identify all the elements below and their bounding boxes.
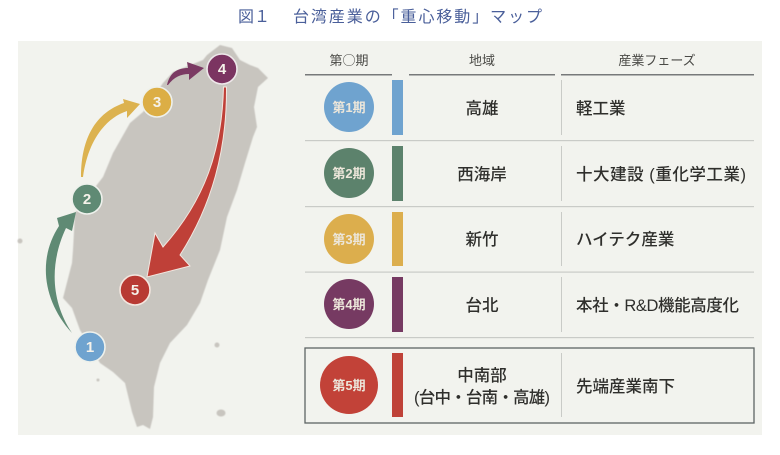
marker 3: 3 xyxy=(153,94,161,111)
table header: 地域 xyxy=(469,53,495,68)
row: period 5 highlighted xyxy=(305,348,754,423)
row: period 2: 第2期 xyxy=(332,166,366,181)
row: period 1: 軽工業 xyxy=(576,99,626,118)
table header: 第○期 xyxy=(329,50,369,69)
row: period 5 highlighted: 中南部 xyxy=(457,366,507,385)
table header: 産業フェーズ xyxy=(618,53,696,68)
table header xyxy=(305,50,754,76)
title: 台湾産業の「重心移動」マップ xyxy=(293,8,542,26)
row: period 3: ハイテク産業 xyxy=(576,230,674,249)
row: period 2: 西海岸 xyxy=(457,165,507,184)
row: period 4 xyxy=(324,277,740,332)
marker 5: 5 xyxy=(131,282,139,299)
row: period 3: 第3期 xyxy=(332,232,366,247)
row: period 4: 台北 xyxy=(466,296,499,315)
marker 2 xyxy=(72,184,102,214)
marker 1 xyxy=(75,332,105,362)
marker 1: 1 xyxy=(86,339,94,356)
arrow: period 2 to 3 xyxy=(81,99,140,177)
marker 3 xyxy=(142,87,172,117)
arrow: period 1 to 2 xyxy=(46,212,76,333)
row: period 2 xyxy=(324,146,746,201)
marker 4 xyxy=(207,54,237,84)
marker 2: 2 xyxy=(83,191,91,208)
arrow: period 4 to 5 xyxy=(147,87,227,277)
row: period 3: 新竹 xyxy=(466,230,498,249)
arrow: period 3 to 4 xyxy=(167,62,204,85)
row: period 3 xyxy=(324,212,674,266)
marker 4: 4 xyxy=(218,61,227,78)
row: period 1 xyxy=(324,80,626,135)
row: period 4: 第4期 xyxy=(332,297,366,312)
row: period 5 highlighted: 先端産業南下 xyxy=(576,377,675,396)
title: 図１ xyxy=(238,9,270,26)
map: Taiwan xyxy=(18,45,268,429)
row: period 5 highlighted: 第5期 xyxy=(332,378,366,393)
row: period 1: 第1期 xyxy=(332,100,366,115)
marker 5 xyxy=(120,275,150,305)
row: period 4: 本社・R&D機能高度化 xyxy=(576,296,740,315)
row: period 5 highlighted: (台中・台南・高雄) xyxy=(414,388,550,407)
row: period 1: 高雄 xyxy=(466,99,498,118)
row: period 2: 十大建設 (重化学工業) xyxy=(576,165,746,184)
